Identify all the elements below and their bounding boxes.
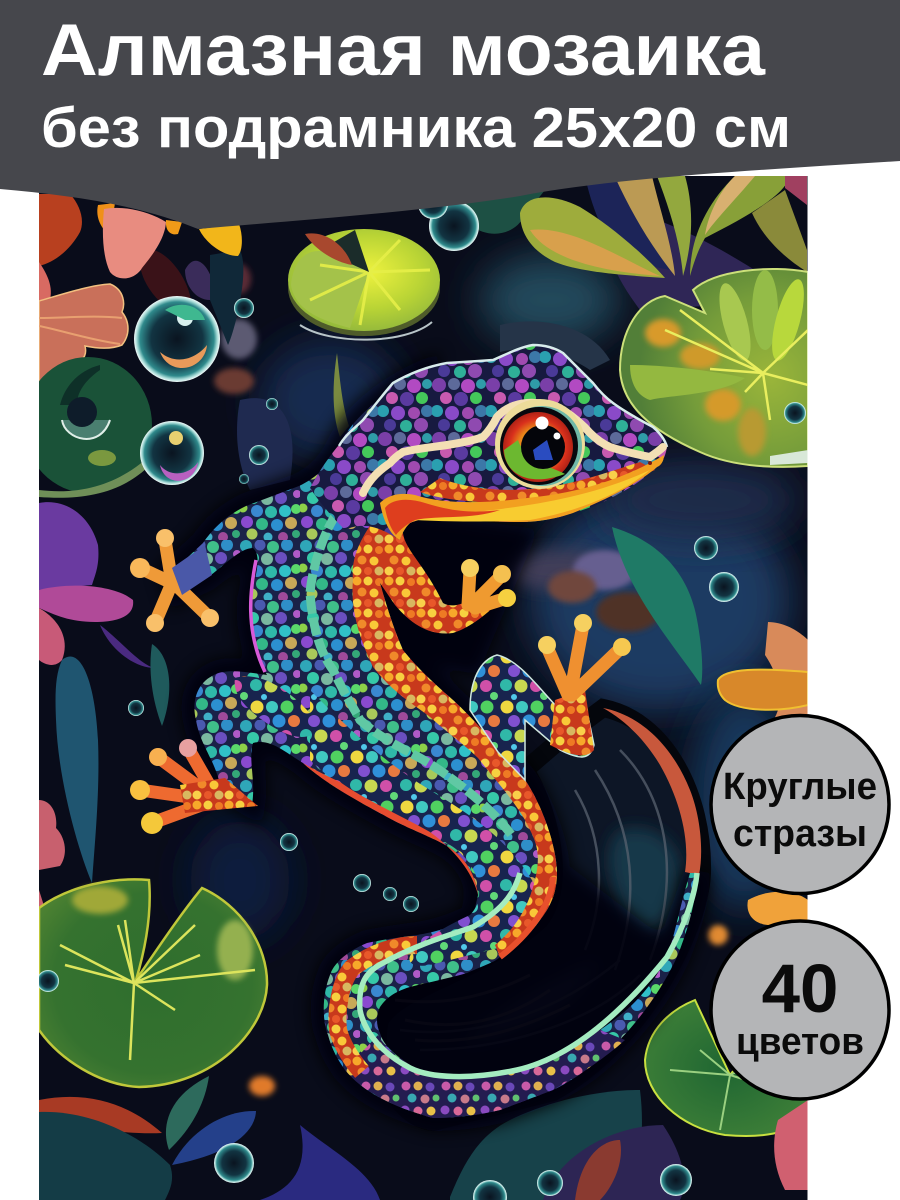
- right lily pad: [620, 269, 810, 467]
- head top outline: [339, 345, 667, 447]
- magenta edge: [251, 560, 265, 672]
- tail tip rim: [603, 708, 701, 875]
- artwork: gecko painting: [24, 176, 810, 1200]
- tail lower purple scales: [345, 1030, 625, 1118]
- badge: round rhinestones: [711, 716, 889, 894]
- lower face purple: [368, 425, 660, 505]
- eye: [495, 399, 585, 489]
- left teal lily pad: [39, 357, 152, 498]
- badge: 40 colours: цветов: [736, 1021, 864, 1063]
- left slim blue leaf: [56, 657, 98, 883]
- central teal leaf: [612, 527, 702, 685]
- stem: [334, 353, 349, 437]
- left orange flower: [39, 262, 128, 395]
- title: [41, 10, 791, 160]
- small teal leaf: [150, 644, 169, 726]
- top-right leaves: [460, 176, 807, 310]
- leg: front left hand: [130, 529, 219, 632]
- mint spine: [310, 513, 513, 837]
- gecko: [130, 345, 701, 1118]
- leg: front right: [378, 532, 516, 634]
- cream stripe: [363, 403, 663, 493]
- header banner: [0, 0, 900, 229]
- badge: 40 colours: 40: [762, 950, 838, 1027]
- right small orange petal: [747, 892, 808, 925]
- title: без подрамника 25х20 см: [41, 96, 791, 160]
- leg: rear right: [470, 614, 631, 780]
- bottom flowers and leaves: [39, 920, 808, 1200]
- title: Алмазная мозаика: [41, 10, 767, 91]
- bottom-left lily pad: [39, 879, 267, 1087]
- badge: 40 colours: [711, 921, 889, 1099]
- badge: round rhinestones: стразы: [733, 813, 867, 855]
- lower red band: [303, 763, 478, 895]
- warm flank band: [352, 505, 557, 957]
- body and tail: [172, 373, 697, 1118]
- chin orange: [380, 455, 664, 540]
- top lily pad: [288, 229, 440, 340]
- black tail swirl: [378, 708, 702, 1122]
- badge: round rhinestones: Круглые: [723, 766, 877, 808]
- leg: rear left warm patch and hand: [130, 676, 322, 834]
- black halo: [172, 373, 697, 1118]
- bottom-right lily pad: [645, 1000, 808, 1136]
- tail warm tip lower: [500, 877, 553, 957]
- right orange flower: [718, 622, 808, 725]
- background blobs: [139, 249, 800, 940]
- head: [310, 345, 667, 540]
- tail warm edge: [338, 945, 417, 1072]
- tail mint stripe: [360, 873, 697, 1077]
- bubbles: [37, 189, 806, 1200]
- left purple flower: [39, 502, 155, 668]
- left pink flower: [39, 800, 65, 906]
- top-left flowers: [39, 194, 242, 278]
- midsection rainbow scales: [310, 690, 535, 966]
- lower face warm scales: [420, 462, 655, 503]
